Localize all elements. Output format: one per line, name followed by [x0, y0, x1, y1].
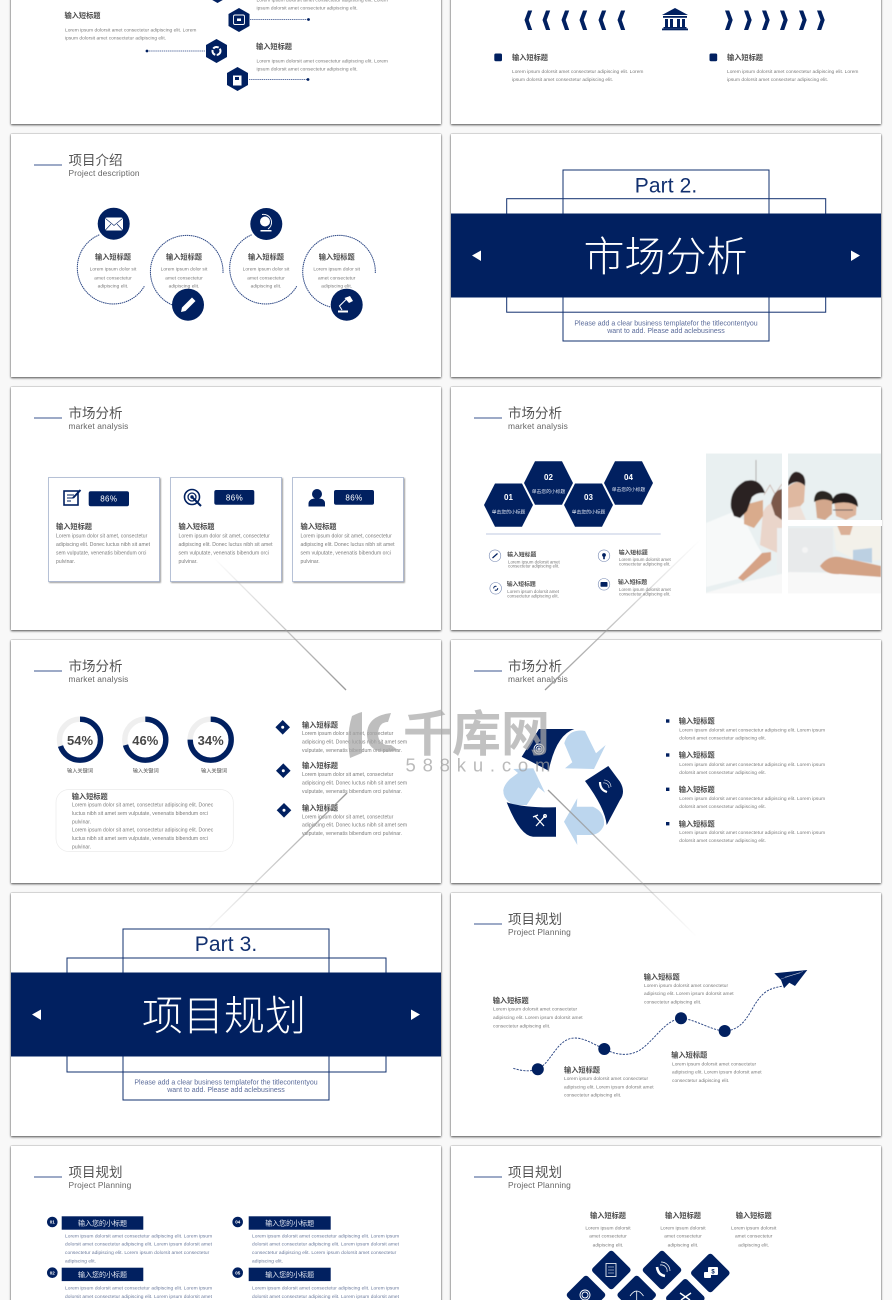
text block 3 — [564, 1065, 654, 1098]
bullet item left: ipsum dolorsit amet consectetur adipiscing elit. — [512, 77, 613, 83]
card 1: Lorem ipsum dolor sit amet, consectetur — [56, 534, 148, 540]
heading: market analysis — [68, 674, 128, 684]
hexagon 02: 02 — [544, 473, 553, 482]
text block 2: 输入短标题 — [644, 972, 680, 981]
dotted connector 2 — [146, 50, 205, 52]
frame rectangles — [67, 929, 386, 1100]
band — [451, 214, 881, 298]
diamond: money chat — [690, 1252, 731, 1294]
heading: 项目规划 — [508, 1165, 562, 1180]
item 02: dolorsit amet consectetur adipiscing elit. Lorem ipsum dolorsit amet — [65, 1294, 213, 1300]
card 2 — [170, 478, 282, 582]
left chevrons — [524, 10, 625, 30]
item 02: Lorem ipsum dolorsit amet consectetur adipiscing elit. Lorem ipsum — [65, 1286, 212, 1292]
card 2: adipiscing elit. Donec luctus nibh sit amet — [178, 542, 273, 548]
bullet item left: Lorem ipsum dolorsit amet consectetur adipiscing elit. Lorem — [512, 69, 643, 75]
panel: project introduction — [11, 134, 441, 377]
item: bulb: consectetur adipiscing elit. — [619, 562, 670, 567]
diamond: tools — [665, 1278, 706, 1300]
text: circle 3: 输入短标题 — [248, 252, 284, 262]
bullet item right: 输入短标题 — [727, 53, 763, 62]
text: circle 3: adipiscing elit. — [251, 284, 281, 290]
heading: Project description — [68, 168, 140, 178]
text block: right item: 输入短标题 — [256, 42, 292, 51]
panel: section divider part 2 — [451, 134, 881, 377]
hexagon 01: 单击您的小标题 — [492, 508, 525, 515]
bullet item left — [494, 53, 643, 83]
card 3: pulvinar. — [300, 559, 320, 565]
donut 54%: 输入关键词 — [67, 766, 93, 774]
text block 3: 输入短标题 — [564, 1065, 600, 1074]
subtitle text: Please add a clear business templatefor the titlecontentyou — [574, 320, 758, 328]
diamond: umbrella — [616, 1274, 657, 1300]
text: circle 1: 输入短标题 — [95, 252, 131, 262]
text block 3: consectetur adipiscing elit. — [564, 1092, 621, 1098]
diamond: target — [565, 1274, 607, 1300]
icon: bank — [662, 8, 688, 30]
text block: right item: ipsum dolorsit amet consectetur adipiscing elit. — [256, 66, 358, 72]
diamond: phone — [641, 1249, 683, 1291]
donut 34% — [190, 719, 231, 774]
panel: market analysis recycle — [451, 640, 881, 883]
panel: project planning diamonds — [451, 1146, 881, 1300]
text column 3: adipiscing elit. — [738, 1242, 769, 1248]
item 05: dolorsit amet consectetur adipiscing elit. Lorem ipsum dolorsit amet — [252, 1294, 400, 1300]
list item 3: Lorem ipsum dolorsit amet consectetur adipiscing elit. Lorem ipsum — [679, 796, 825, 802]
hexagon 03: 单击您的小标题 — [572, 508, 605, 515]
hexagon icon: calendar — [228, 8, 250, 32]
list item 2 — [666, 751, 825, 776]
item: mail: Lorem ipsum dolorsit amet — [619, 587, 672, 592]
text column 3 — [731, 1211, 777, 1248]
bullet item right — [710, 53, 858, 83]
item 04: dolorsit amet consectetur adipiscing elit. Lorem ipsum dolorsit amet — [252, 1242, 400, 1248]
text block 1: Lorem ipsum dolorsit amet consectetur — [493, 1007, 577, 1013]
item: pencil: Lorem ipsum dolorsit amet — [508, 559, 561, 564]
item 2: vulputate, venenatis bibendum orci pulvinar. — [302, 789, 402, 795]
item 01: Lorem ipsum dolorsit amet consectetur adipiscing elit. Lorem ipsum — [65, 1234, 212, 1240]
watermark logo: 千库网 — [403, 708, 550, 762]
card 3: adipiscing elit. Donec luctus nibh sit amet — [300, 542, 395, 548]
heading: 市场分析 — [508, 658, 562, 674]
item: bulb: 输入短标题 — [619, 548, 648, 556]
list item 3: 输入短标题 — [679, 785, 715, 794]
panel: section divider part 3 — [11, 893, 441, 1136]
heading — [474, 1165, 571, 1190]
heading: market analysis — [508, 674, 568, 684]
hexagon icon: book — [227, 67, 248, 91]
panel: market analysis cards — [11, 387, 441, 630]
rounded text box: Lorem ipsum dolor sit amet, consectetur adipiscing elit. Donec — [72, 802, 214, 808]
donut 54% — [60, 719, 100, 774]
text: circle 1: Lorem ipsum dolor sit — [90, 267, 137, 273]
item 04: consectetur adipiscing elit. Lorem ipsum dolorsit amet consectetur — [252, 1250, 397, 1256]
card 2: Lorem ipsum dolor sit amet, consectetur — [178, 534, 270, 540]
text column 2 — [660, 1211, 706, 1248]
donut 46%: 输入关键词 — [133, 766, 159, 774]
hexagon 04: 04 — [624, 473, 633, 482]
item: bulb — [598, 548, 672, 567]
text: circle 2: adipiscing elit. — [169, 284, 199, 290]
item 01: 输入您的小标题 — [78, 1219, 127, 1228]
item 3: Lorem ipsum dolor sit amet, consectetur — [302, 814, 394, 820]
heading: 市场分析 — [68, 658, 122, 674]
rounded text box: Lorem ipsum dolor sit amet, consectetur adipiscing elit. Donec — [72, 828, 214, 834]
divider — [486, 533, 661, 535]
panel: project planning timeline — [451, 893, 881, 1136]
arrow right — [851, 250, 860, 261]
donut 54%: 54% — [67, 733, 93, 748]
text block 3: adipiscing elit. Lorem ipsum dolorsit amet — [564, 1084, 654, 1090]
list item 4: dolorsit amet consectetur adipiscing elit. — [679, 838, 766, 844]
diamond: document — [591, 1249, 632, 1291]
text column 3: 输入短标题 — [736, 1211, 772, 1220]
icon: mail — [98, 208, 130, 240]
text block 2 — [644, 972, 734, 1005]
item 05: 输入您的小标题 — [265, 1270, 314, 1279]
item 04: 04 — [235, 1220, 241, 1225]
subtitle text: want to add. Please add aclebusiness — [606, 328, 725, 335]
rounded text box: pulvinar. — [72, 844, 91, 850]
item 02: 02 — [50, 1270, 55, 1275]
heading — [34, 658, 128, 684]
dashed route — [513, 986, 783, 1071]
list item 3 — [666, 785, 825, 810]
item 04: Lorem ipsum dolorsit amet consectetur adipiscing elit. Lorem ipsum — [252, 1234, 399, 1240]
item 1: adipiscing elit. Donec luctus nibh sit amet sem — [302, 740, 407, 746]
icon: target — [184, 490, 201, 506]
card 1 — [48, 478, 160, 582]
card 2: pulvinar. — [178, 559, 198, 565]
card 3: sem vulputate, venenatis bibendum orci — [300, 551, 391, 557]
route node 3 — [675, 1012, 687, 1024]
bullet item right: ipsum dolorsit amet consectetur adipiscing elit. — [727, 77, 828, 83]
item 1: 输入短标题 — [302, 720, 338, 729]
donut 34%: 34% — [198, 733, 224, 748]
item 01: consectetur adipiscing elit. Lorem ipsum dolorsit amet consectetur — [65, 1250, 210, 1256]
text column 1: 输入短标题 — [590, 1211, 626, 1220]
list item 4: Lorem ipsum dolorsit amet consectetur adipiscing elit. Lorem ipsum — [679, 830, 825, 836]
text block: left item: Lorem ipsum dolorsit amet consectetur adipiscing elit. Lorem — [65, 28, 196, 34]
card 3 — [292, 478, 404, 582]
panel: hexagon list slide — [11, 0, 441, 124]
recycle diagram — [503, 729, 623, 845]
item 01: adipiscing elit. — [65, 1258, 96, 1264]
heading: 市场分析 — [68, 405, 122, 421]
hexagon icon: recycle — [206, 39, 227, 63]
item: refresh: Lorem ipsum dolorsit amet — [507, 589, 560, 594]
item 02: 输入您的小标题 — [78, 1270, 127, 1279]
item 04: adipiscing elit. — [252, 1258, 283, 1264]
hexagon 02 — [524, 461, 573, 505]
band — [11, 972, 441, 1056]
text column 3: amet consectetur — [735, 1234, 773, 1240]
text: circle 4 — [313, 252, 361, 290]
dashed arcs — [77, 235, 375, 307]
item 1: Lorem ipsum dolor sit amet, consectetur — [302, 731, 394, 737]
part label: Part 3. — [195, 933, 257, 956]
card 3: 输入短标题 — [300, 522, 336, 531]
heading: Project Planning — [68, 1180, 132, 1190]
frame rectangles — [507, 170, 826, 341]
donut 46%: 46% — [132, 733, 159, 748]
item: mail: consectetur adipiscing elit. — [619, 592, 670, 597]
item: refresh — [490, 580, 560, 598]
item 3: vulputate, venenatis bibendum orci pulvinar. — [302, 831, 402, 837]
hexagon 03: 03 — [584, 493, 593, 502]
text column 1: amet consectetur — [589, 1234, 627, 1240]
hexagon 03 — [564, 484, 613, 527]
panel: project planning numbered list — [11, 1146, 441, 1300]
heading — [34, 1165, 132, 1190]
text block: left item: 输入短标题 — [64, 11, 100, 20]
item 01 — [47, 1216, 213, 1264]
text: circle 2 — [161, 252, 208, 290]
rounded text box: luctus nibh sit amet sem vulputate, venenatis bibendum orci — [72, 811, 208, 817]
watermark logo: 588ku.com — [406, 754, 557, 776]
icon: phone — [600, 780, 611, 792]
text: circle 1 — [90, 252, 137, 290]
list item 3: dolorsit amet consectetur adipiscing elit. — [679, 804, 766, 810]
donut 46% — [125, 719, 166, 774]
text column 3: Lorem ipsum dolorsit — [731, 1226, 777, 1232]
heading: 项目介绍 — [68, 153, 122, 168]
hexagon 01: 01 — [504, 493, 513, 502]
text block 1 — [493, 996, 583, 1029]
text block 1: adipiscing elit. Lorem ipsum dolorsit amet — [493, 1015, 583, 1021]
item 3: 输入短标题 — [302, 804, 338, 812]
list item 1: dolorsit amet consectetur adipiscing elit. — [679, 736, 766, 742]
item 3: adipiscing elit. Donec luctus nibh sit amet sem — [302, 823, 407, 829]
item: pencil: 输入短标题 — [507, 550, 536, 558]
item 04: 输入您的小标题 — [265, 1219, 314, 1228]
text: circle 4: 输入短标题 — [319, 252, 355, 262]
text column 2: 输入短标题 — [665, 1211, 701, 1220]
panel: market analysis donuts — [11, 640, 441, 883]
card 2: sem vulputate, venenatis bibendum orci — [178, 551, 269, 557]
subtitle text: want to add. Please add aclebusiness — [166, 1087, 285, 1094]
text block: right item: Lorem ipsum dolorsit amet consectetur adipiscing elit. Lorem — [256, 58, 388, 64]
item: pencil — [489, 550, 561, 569]
item 3 — [277, 803, 407, 837]
icon: lamp — [331, 289, 363, 321]
item 04 — [232, 1216, 400, 1264]
text block: right item — [256, 42, 388, 72]
part label: Part 2. — [635, 174, 697, 197]
list item 4 — [666, 819, 825, 844]
text block: top right partial: ipsum dolorsit amet consectetur adipiscing elit. — [256, 6, 358, 12]
heading: 项目规划 — [508, 912, 562, 927]
text: circle 4: adipiscing elit. — [321, 284, 352, 290]
text: circle 3: amet consectetur — [247, 275, 285, 281]
panel: chevrons slide — [451, 0, 881, 124]
heading — [474, 405, 568, 431]
heading: Project Planning — [508, 927, 571, 937]
text block 4: Lorem ipsum dolorsit amet consectetur — [672, 1061, 756, 1067]
list item 1: 输入短标题 — [679, 717, 715, 726]
item 2 — [276, 761, 407, 795]
text block 2: adipiscing elit. Lorem ipsum dolorsit amet — [644, 991, 734, 997]
diamond: money chat: $ — [711, 1270, 715, 1276]
text block 2: Lorem ipsum dolorsit amet consectetur — [644, 983, 728, 989]
item 02 — [47, 1267, 213, 1300]
text column 1: adipiscing elit. — [593, 1242, 623, 1248]
dotted connector 1 — [250, 18, 310, 21]
rounded text box: luctus nibh sit amet sem vulputate, venenatis bibendum orci — [72, 836, 208, 842]
icon: person — [308, 489, 325, 506]
icon: globe — [250, 208, 282, 240]
rounded text box: pulvinar. — [72, 819, 91, 825]
text block: left item: ipsum dolorsit amet consectetur adipiscing elit. — [65, 36, 166, 42]
text: circle 3: Lorem ipsum dolor sit — [243, 267, 290, 273]
subtitle text: Please add a clear business templatefor the titlecontentyou — [134, 1080, 318, 1086]
badge: 86% — [345, 493, 363, 502]
bullet item right: Lorem ipsum dolorsit amet consectetur adipiscing elit. Lorem — [727, 69, 858, 75]
text: circle 4: amet consectetur — [318, 275, 356, 281]
text block: top right partial — [256, 0, 388, 12]
panel: market analysis hexagons and photo — [451, 387, 882, 630]
text column 2: Lorem ipsum dolorsit — [660, 1226, 706, 1232]
text block 1: 输入短标题 — [493, 996, 529, 1005]
list item 2: 输入短标题 — [679, 751, 715, 760]
text block 3: Lorem ipsum dolorsit amet consectetur — [564, 1076, 648, 1082]
card 1: 输入短标题 — [56, 522, 92, 531]
list item 4: 输入短标题 — [679, 819, 715, 828]
section title: 项目规划 — [142, 993, 306, 1039]
item 01: 01 — [50, 1220, 55, 1225]
card 1: pulvinar. — [56, 559, 75, 565]
route node 2 — [598, 1043, 610, 1055]
text block 4: adipiscing elit. Lorem ipsum dolorsit amet — [672, 1070, 762, 1076]
hexagon 04: 单击您的小标题 — [612, 486, 645, 493]
text column 1: Lorem ipsum dolorsit — [585, 1226, 631, 1232]
heading: market analysis — [508, 421, 568, 431]
hexagon 01 — [484, 484, 533, 527]
rounded text box: 输入短标题 — [72, 792, 108, 801]
text: circle 1: amet consectetur — [94, 275, 132, 281]
text block 4 — [671, 1051, 762, 1084]
item: bulb: Lorem ipsum dolorsit amet — [619, 557, 672, 562]
item 1 — [275, 720, 407, 754]
text: circle 3 — [243, 252, 290, 290]
text column 2: adipiscing elit. — [668, 1242, 698, 1248]
route node 1 — [532, 1063, 544, 1075]
item: refresh: 输入短标题 — [507, 580, 536, 588]
text block: left item — [64, 11, 196, 42]
list item 1: Lorem ipsum dolorsit amet consectetur adipiscing elit. Lorem ipsum — [679, 728, 825, 734]
icon: paper plane — [774, 970, 807, 988]
card 3: Lorem ipsum dolor sit amet, consectetur — [300, 534, 392, 540]
icon: note — [64, 490, 80, 505]
text column 1 — [585, 1211, 631, 1248]
text: circle 1: adipiscing elit. — [98, 284, 128, 290]
heading — [474, 912, 571, 937]
item 01: dolorsit amet consectetur adipiscing elit. Lorem ipsum dolorsit amet — [65, 1242, 213, 1248]
text column 2: amet consectetur — [664, 1234, 702, 1240]
hexagon icon: top partial — [207, 0, 228, 3]
item: mail — [598, 578, 672, 597]
arrow right — [411, 1010, 420, 1020]
heading: market analysis — [68, 421, 128, 431]
item 05 — [232, 1267, 400, 1300]
item: refresh: consectetur adipiscing elit. — [507, 593, 559, 598]
donut 34%: 输入关键词 — [201, 766, 227, 774]
item: pencil: consectetur adipiscing elit. — [508, 564, 560, 569]
watermark logo — [348, 708, 557, 776]
photo: team around laptop — [705, 453, 882, 594]
icon: target — [534, 744, 544, 754]
item 2: 输入短标题 — [302, 761, 338, 770]
watermark diagonal lines — [200, 540, 700, 937]
heading — [34, 153, 140, 178]
item 05: Lorem ipsum dolorsit amet consectetur adipiscing elit. Lorem ipsum — [252, 1286, 399, 1292]
icon: pencil — [172, 289, 204, 321]
heading: Project Planning — [508, 1180, 571, 1190]
text block 4: 输入短标题 — [671, 1051, 707, 1060]
badge: 86% — [100, 495, 117, 504]
item 05: 05 — [235, 1270, 241, 1275]
badge: 86% — [226, 493, 243, 502]
hexagon 04 — [604, 461, 653, 505]
card 1: adipiscing elit. Donec luctus nibh sit amet — [56, 542, 151, 548]
text block 4: consectetur adipiscing elit. — [672, 1078, 729, 1084]
route node 4 — [719, 1025, 731, 1037]
arrow left — [32, 1010, 41, 1020]
heading — [34, 405, 128, 431]
text: circle 2: 输入短标题 — [166, 252, 202, 262]
heading — [474, 658, 568, 684]
heading: 市场分析 — [508, 405, 562, 421]
rounded text box — [56, 790, 233, 852]
item 2: adipiscing elit. Donec luctus nibh sit amet sem — [302, 781, 407, 787]
text block 2: consectetur adipiscing elit. — [644, 999, 701, 1005]
text: circle 2: amet consectetur — [165, 275, 203, 281]
heading: 项目规划 — [68, 1165, 122, 1180]
arrow left — [472, 250, 481, 261]
text: circle 4: Lorem ipsum dolor sit — [313, 267, 361, 273]
section title: 市场分析 — [584, 234, 748, 280]
subtitle text — [574, 320, 758, 335]
list item 2: dolorsit amet consectetur adipiscing elit. — [679, 770, 766, 776]
text: circle 2: Lorem ipsum dolor sit — [161, 267, 208, 273]
right chevrons — [725, 10, 825, 30]
text block 1: consectetur adipiscing elit. — [493, 1023, 550, 1029]
subtitle text — [134, 1080, 318, 1094]
dotted connector 3 — [249, 78, 309, 81]
list item 1 — [666, 717, 825, 742]
icon: tools — [533, 815, 546, 826]
bullet item left: 输入短标题 — [512, 53, 548, 62]
item: mail: 输入短标题 — [618, 578, 647, 586]
hexagon 02: 单击您的小标题 — [532, 488, 565, 495]
item 2: Lorem ipsum dolor sit amet, consectetur — [302, 772, 394, 778]
item 1: vulputate, venenatis bibendum orci pulvinar. — [302, 748, 402, 754]
list item 2: Lorem ipsum dolorsit amet consectetur adipiscing elit. Lorem ipsum — [679, 762, 825, 768]
card 2: 输入短标题 — [178, 522, 214, 531]
card 1: sem vulputate, venenatis bibendum orci — [56, 551, 146, 557]
